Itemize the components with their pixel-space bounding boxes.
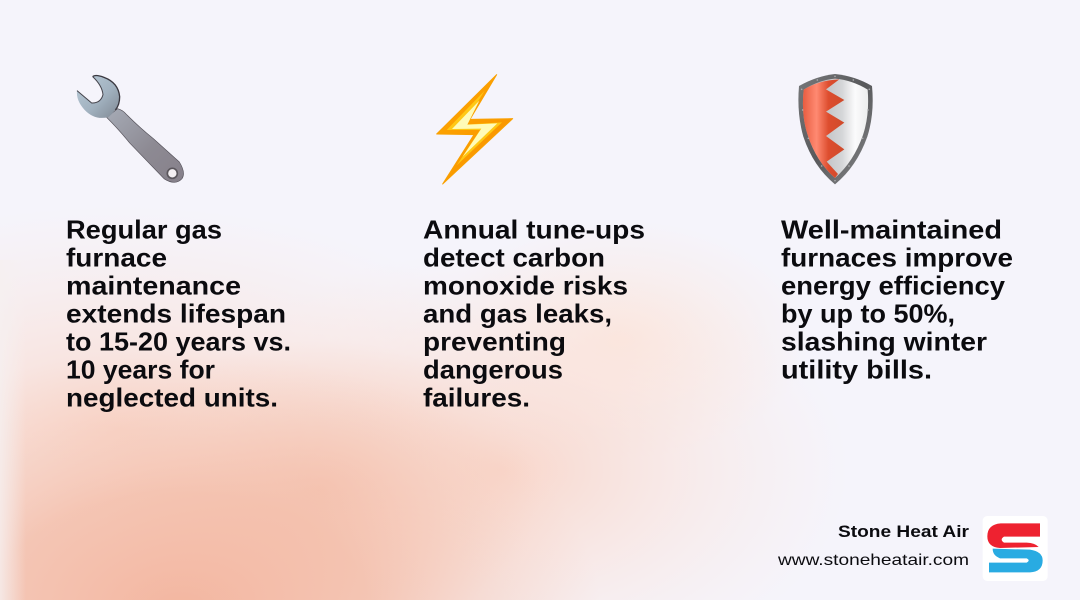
icon: wrench xyxy=(77,75,183,182)
text: safety: Annual tune-ups xyxy=(423,214,645,244)
logo xyxy=(983,516,1048,581)
website: www.stoneheatair.com xyxy=(777,552,969,569)
text: safety: detect carbon xyxy=(423,242,605,272)
brand name: Stone Heat Air xyxy=(838,522,969,541)
text: efficiency: energy efficiency xyxy=(781,270,1006,300)
text: efficiency xyxy=(781,214,1013,384)
text: lifespan: Regular gas xyxy=(66,214,222,244)
text: lifespan: extends lifespan xyxy=(66,298,286,328)
text: safety: and gas leaks, xyxy=(423,298,612,328)
icon: shield xyxy=(798,74,873,184)
text: efficiency: by up to 50%, xyxy=(781,298,955,328)
text: safety: failures. xyxy=(423,382,530,412)
panel: efficiency xyxy=(781,74,1013,384)
text: efficiency: slashing winter xyxy=(781,326,987,356)
text: lifespan: neglected units. xyxy=(66,382,278,412)
panel: safety xyxy=(423,75,645,413)
text: safety: monoxide risks xyxy=(423,270,628,300)
text: safety: dangerous xyxy=(423,354,563,384)
text: lifespan: furnace xyxy=(66,242,167,272)
text: lifespan xyxy=(66,214,291,412)
text: lifespan: 10 years for xyxy=(66,354,215,384)
text: efficiency: Well-maintained xyxy=(781,214,1002,244)
text: lifespan: maintenance xyxy=(66,270,241,300)
text: lifespan: to 15-20 years vs. xyxy=(66,326,291,356)
icon: lightning bolt xyxy=(437,75,513,184)
panel: lifespan xyxy=(66,75,291,412)
text: safety: preventing xyxy=(423,326,566,356)
text: safety xyxy=(423,214,645,412)
text: efficiency: utility bills. xyxy=(781,354,932,384)
text: efficiency: furnaces improve xyxy=(781,242,1013,272)
